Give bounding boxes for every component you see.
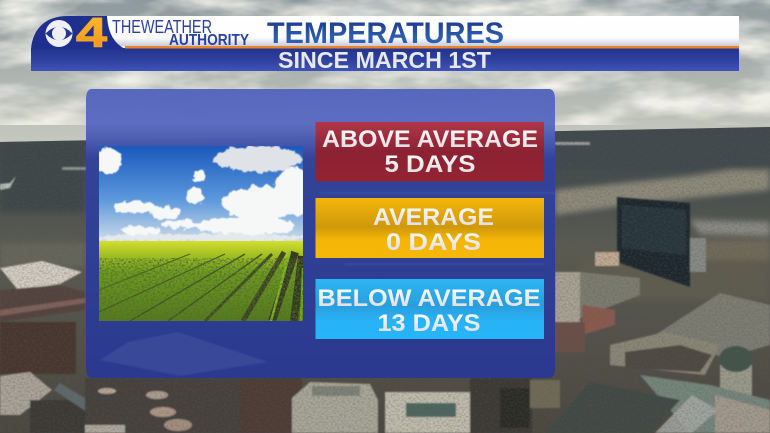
photo: green field under blue sky <box>90 146 310 321</box>
stat: above average <box>316 122 544 182</box>
stat: average: 0 DAYS <box>386 229 481 256</box>
city <box>0 120 770 433</box>
stat: below average: BELOW AVERAGE <box>318 285 540 312</box>
left buildings <box>0 261 82 290</box>
sky <box>0 0 770 145</box>
header banner <box>31 9 739 73</box>
stat: below average <box>316 279 544 339</box>
banner lower blue strip <box>31 48 739 71</box>
subheading: since march 1st: SINCE MARCH 1ST <box>278 47 491 73</box>
panel: temperature summary <box>86 89 555 378</box>
stat: above average: ABOVE AVERAGE <box>322 126 538 153</box>
logo tab: dark blue <box>31 16 125 49</box>
logo numeral 4: 4 <box>76 9 108 56</box>
stat: average: AVERAGE <box>373 204 494 231</box>
stat: above average: 5 DAYS <box>384 151 476 178</box>
stat: below average: 13 DAYS <box>378 310 480 337</box>
wordmark: The Weather Authority <box>112 17 249 49</box>
panel background <box>86 89 555 378</box>
banner white title strip <box>105 16 739 46</box>
heading: temperatures: TEMPERATURES <box>267 17 504 50</box>
right: dark tower <box>617 197 690 287</box>
stat: average <box>316 198 544 258</box>
orange accent line <box>125 46 739 48</box>
wordmark: The Weather Authority: THEWEATHER <box>112 17 212 37</box>
icon: CBS eye <box>46 20 72 47</box>
wordmark: The Weather Authority: AUTHORITY <box>169 32 249 49</box>
